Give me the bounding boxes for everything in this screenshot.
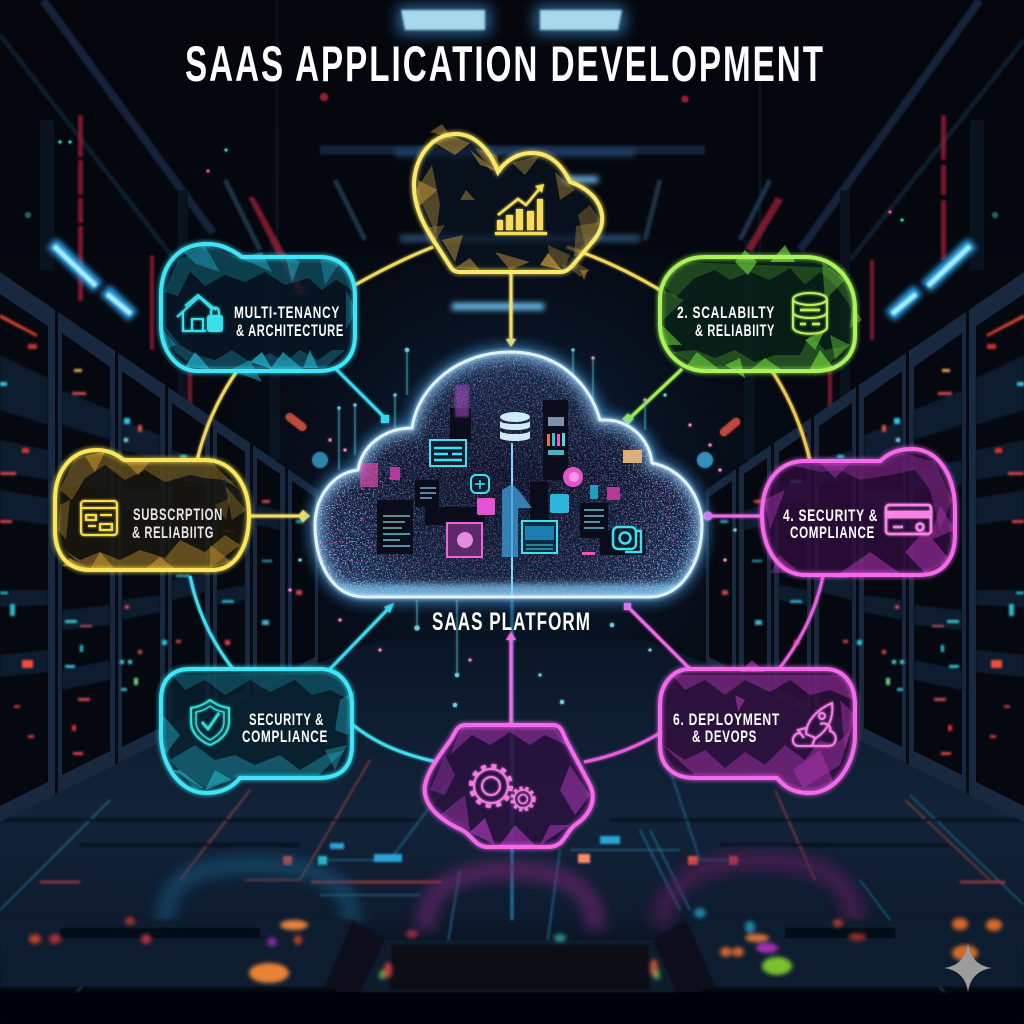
app icon xyxy=(471,475,489,493)
cloud speckle texture xyxy=(310,348,708,602)
cloud outline xyxy=(315,352,702,597)
magenta outline xyxy=(425,725,593,847)
gemini sparkle xyxy=(944,943,992,992)
particles xyxy=(25,93,998,707)
magenta shards xyxy=(430,727,590,845)
green outline xyxy=(660,257,855,371)
floor glow reflections xyxy=(165,860,855,930)
green shards xyxy=(662,245,862,378)
data stem xyxy=(511,443,513,597)
label: security xyxy=(783,507,878,542)
ceiling beams xyxy=(0,0,1024,290)
pink tower glow xyxy=(455,385,469,417)
cyan shards xyxy=(163,672,355,790)
icon: rocket and cloud xyxy=(793,703,836,746)
server racks right xyxy=(706,272,1024,822)
floor circuit lines xyxy=(0,600,1024,1000)
pink square xyxy=(477,498,495,515)
cyan outline xyxy=(161,669,352,793)
ring connectors xyxy=(190,247,823,762)
icon: credit card xyxy=(886,505,931,534)
label: scalability: 2. SCALABILTY xyxy=(677,304,775,322)
icon: shield xyxy=(191,700,229,745)
amber shards xyxy=(58,452,246,569)
tall dashboard xyxy=(543,400,568,480)
label: multi-tenancy: MULTI-TENANCY xyxy=(234,304,340,322)
blue tower xyxy=(502,484,532,557)
label: subscription xyxy=(132,506,223,542)
screen panel 1 xyxy=(430,440,466,466)
central platform cloud xyxy=(310,348,708,602)
panel: subscription and reliability xyxy=(55,450,249,570)
camera icon xyxy=(613,527,641,552)
ceiling lights xyxy=(398,6,625,34)
panel: analytics top cloud xyxy=(414,124,602,280)
panel: security and compliance right xyxy=(762,449,955,575)
panel: scalability and reliability xyxy=(660,245,862,378)
label: multi-tenancy: & ARCHITECTURE xyxy=(236,322,344,340)
spoke connectors to platform xyxy=(250,272,762,725)
label: deployment: 6. DEPLOYMENT xyxy=(673,711,780,729)
center haze xyxy=(200,250,824,710)
icon: growth chart xyxy=(495,184,547,235)
pink framed image xyxy=(447,523,482,557)
database icon xyxy=(500,412,530,441)
label: deployment: & DEVOPS xyxy=(692,728,757,746)
panel: deployment and devops xyxy=(660,660,855,793)
console lights xyxy=(29,908,1002,983)
label: security: COMPLIANCE xyxy=(790,524,875,542)
label: subscription: SUBSCRPTION xyxy=(133,506,223,524)
magenta outline xyxy=(762,449,955,575)
panel: multi-tenancy and architecture xyxy=(161,244,356,382)
accent blocks xyxy=(360,450,642,555)
cyan shards xyxy=(163,246,356,382)
yellow outline xyxy=(55,450,249,570)
screen panel 2 xyxy=(522,521,557,553)
code lines xyxy=(383,488,604,546)
label: subscription: & RELIABIITG xyxy=(132,524,214,542)
label: deployment xyxy=(673,711,780,746)
floor indicator lights xyxy=(283,836,738,865)
icon: house and lock xyxy=(177,295,222,331)
label: scalability: & RELIABIITY xyxy=(695,322,775,340)
dark backing blocks xyxy=(377,408,645,555)
server racks left xyxy=(0,272,318,822)
platform label: SAAS PLATFORM xyxy=(432,608,591,636)
red wall strips xyxy=(78,115,946,430)
cyan square xyxy=(550,494,569,513)
panel: security and compliance left xyxy=(161,669,355,793)
label: security: SECURITY & xyxy=(249,711,324,729)
label: scalability xyxy=(677,304,775,340)
label: security: COMPLIANCE xyxy=(242,728,328,746)
wall columns xyxy=(40,120,984,460)
panel: bottom gears node xyxy=(425,725,593,847)
blue bands behind top node xyxy=(395,148,640,310)
pink gear xyxy=(563,467,583,487)
label: security xyxy=(242,711,328,746)
city of app screens xyxy=(360,385,645,597)
label: security: 4. SECURITY & xyxy=(783,507,878,525)
magenta outline xyxy=(660,669,855,793)
floor xyxy=(0,640,1024,1024)
label: multi-tenancy xyxy=(234,304,344,340)
icon: database xyxy=(793,293,827,334)
control consoles xyxy=(0,920,1024,1024)
cyan light bars xyxy=(52,243,972,316)
icon: billing dashboard xyxy=(81,501,117,535)
yellow outline xyxy=(414,134,602,272)
icon: gears xyxy=(471,766,534,810)
magenta shards xyxy=(663,660,855,792)
cyan outline xyxy=(161,244,355,371)
magenta shards xyxy=(764,452,955,573)
yellow shards xyxy=(416,124,600,280)
